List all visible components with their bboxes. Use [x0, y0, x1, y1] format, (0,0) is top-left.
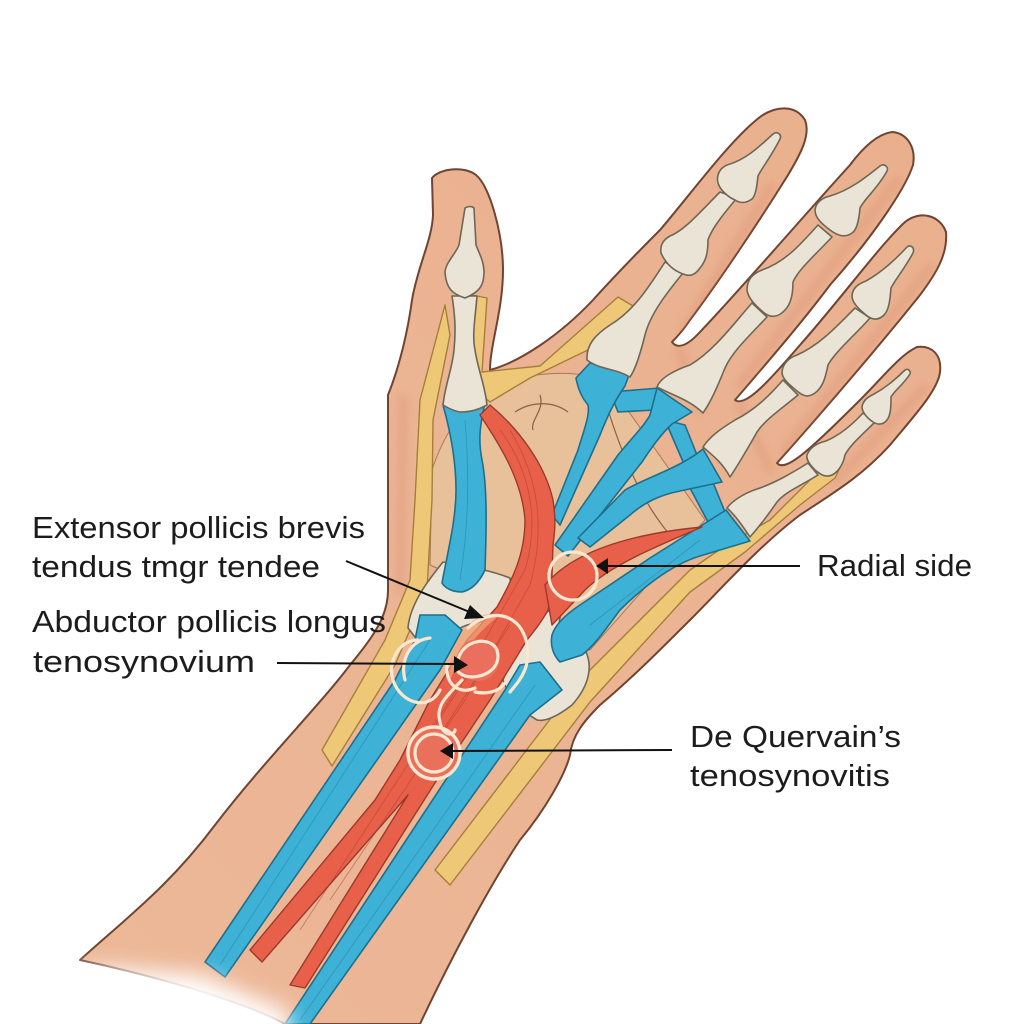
red branch to radial side — [545, 527, 702, 625]
lower carpal bones — [503, 609, 589, 720]
forearm tendon left — [205, 615, 462, 977]
palm detail lines — [454, 395, 670, 560]
arrow: to radial side — [596, 558, 800, 574]
illustration: hand anatomy — [80, 108, 946, 1024]
inflamed sheath centre — [457, 639, 499, 681]
palm tissue — [430, 373, 705, 650]
yellow tendon sheath: thumb — [322, 305, 450, 766]
thumb tendon — [442, 403, 486, 592]
finger bones — [443, 133, 914, 537]
label: tendus tmgr tendee: tendus tmgr tendee — [32, 549, 320, 584]
middle finger phalanges — [657, 165, 887, 413]
yellow sheath: web — [470, 295, 633, 402]
arrow: to De Quervain's — [440, 743, 672, 759]
inflamed halo — [449, 614, 500, 680]
inflamed sheath lower — [408, 727, 460, 779]
white fade at forearm base — [40, 968, 290, 1024]
label: tenosynovium: tenosynovium — [33, 644, 255, 679]
ring finger phalanges — [703, 246, 914, 477]
tendon to index finger — [552, 363, 630, 525]
arrow: to tenosynovium — [277, 656, 468, 673]
inflammation rings — [392, 552, 597, 772]
finger shading — [400, 180, 930, 590]
label: De Quervain's tenosynovitis: De Quervain’s — [690, 719, 901, 754]
tendon fibres — [220, 420, 700, 1020]
label: Abductor pollicis longus: Abductor pollicis longus — [32, 604, 386, 639]
forearm tendon right — [285, 662, 562, 1024]
little finger phalanges — [727, 369, 910, 537]
label: De Quervain's tenosynovitis: tenosynovitis — [690, 758, 890, 793]
hand and forearm skin — [80, 108, 946, 1024]
label: Radial side: Radial side — [817, 548, 972, 583]
tendon to little finger — [551, 510, 750, 662]
tendon to middle finger — [555, 388, 692, 556]
arrow: to Extensor tendon — [346, 561, 484, 619]
yellow sheath: little finger side — [435, 463, 842, 885]
label: De Quervain's tenosynovitis — [690, 719, 901, 793]
main red tendon — [250, 405, 555, 988]
tendon to ring finger — [578, 449, 722, 547]
index finger phalanges — [587, 133, 780, 377]
upper carpal bones — [408, 562, 510, 639]
label: Extensor pollicis brevis: Extensor pollicis brevis — [32, 510, 365, 545]
thumb phalanges — [443, 206, 487, 412]
connecting blue bands — [610, 388, 725, 522]
